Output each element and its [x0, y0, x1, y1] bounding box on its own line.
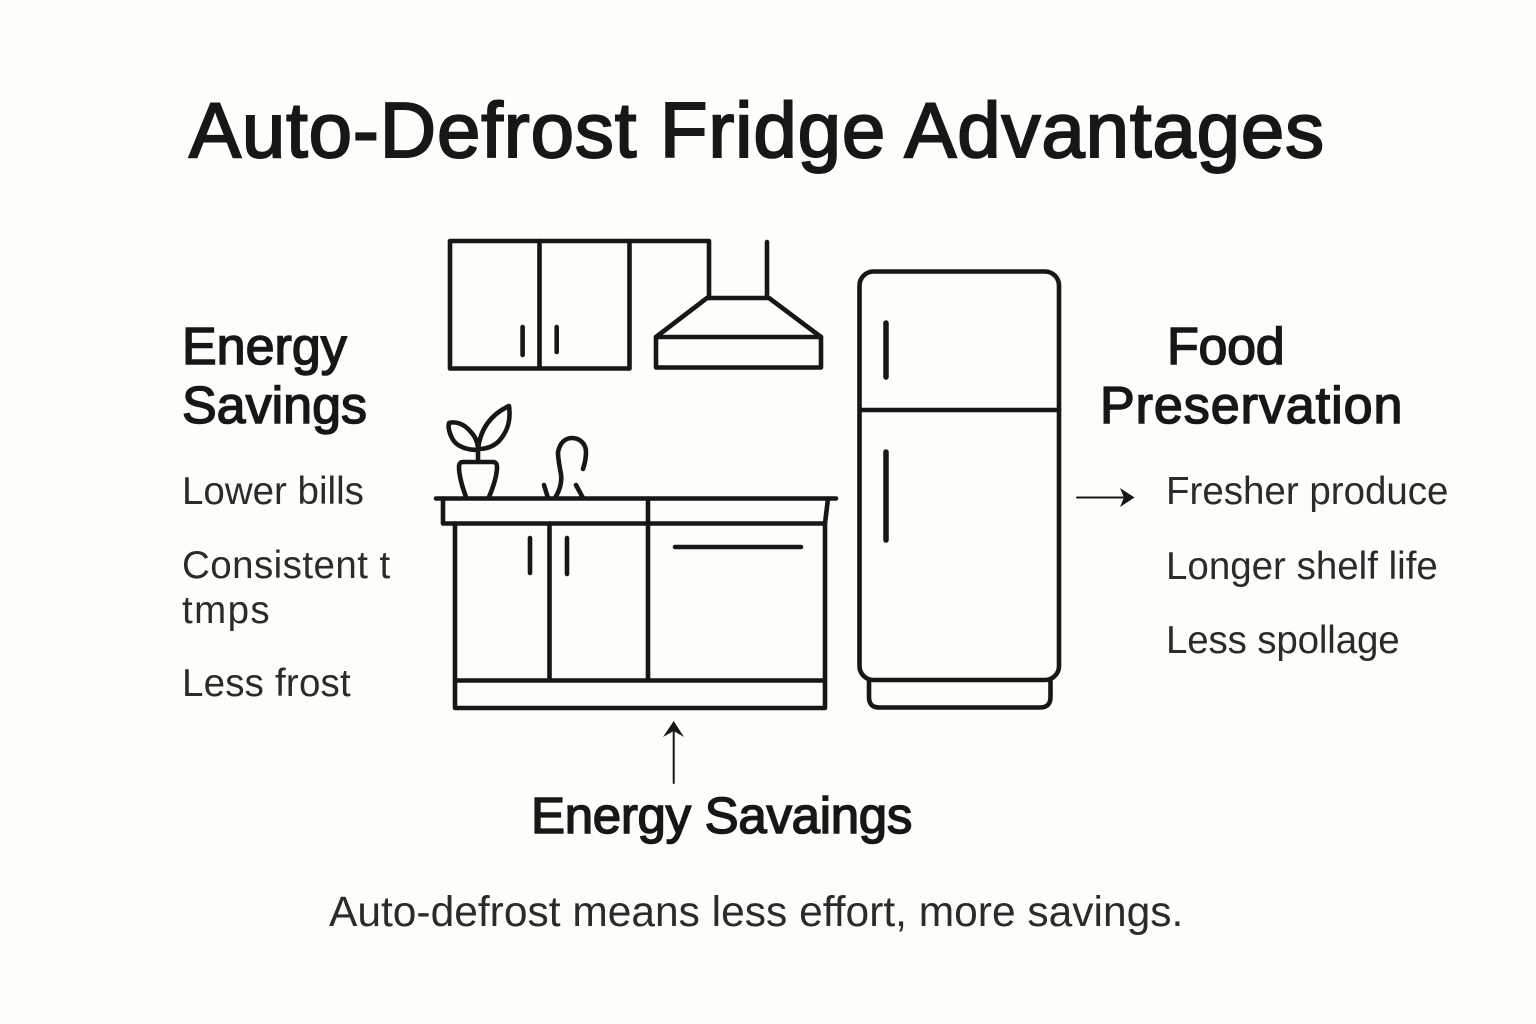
list: food preservation benefits: Longer shelf life	[1166, 545, 1438, 588]
icon: refrigerator	[860, 272, 1059, 708]
list: energy savings benefits: Less frost	[182, 662, 351, 705]
list: energy savings benefits: tmps	[182, 589, 271, 632]
title: Auto-Defrost Fridge Advantages	[189, 86, 1325, 174]
tagline: Auto-defrost means less effort, more savings.	[329, 889, 1183, 936]
heading: food preservation	[1100, 318, 1403, 435]
heading: energy savings left	[182, 318, 367, 435]
heading: food preservation: Food	[1167, 318, 1284, 376]
list: energy savings benefits	[182, 470, 391, 705]
heading: energy savings bottom: Energy Savaings	[531, 787, 912, 844]
heading: food preservation: Preservation	[1100, 377, 1403, 435]
list: food preservation benefits: Less spollage	[1166, 619, 1400, 662]
heading: energy savings left: Savings	[182, 377, 367, 435]
icon: lower cabinets	[436, 498, 836, 708]
arrow: to food preservation	[1077, 488, 1134, 507]
list: food preservation benefits	[1166, 470, 1448, 662]
list: energy savings benefits: Consistent t	[182, 544, 391, 587]
list: food preservation benefits: Fresher produce	[1166, 470, 1448, 513]
icon: upper cabinets	[450, 241, 709, 368]
list: energy savings benefits: Lower bills	[182, 470, 364, 513]
icon: potted plant	[449, 406, 510, 497]
heading: energy savings left: Energy	[182, 318, 347, 376]
icon: faucet	[544, 438, 586, 498]
icon: range hood	[656, 242, 821, 368]
arrow: up from energy savings	[663, 721, 684, 783]
